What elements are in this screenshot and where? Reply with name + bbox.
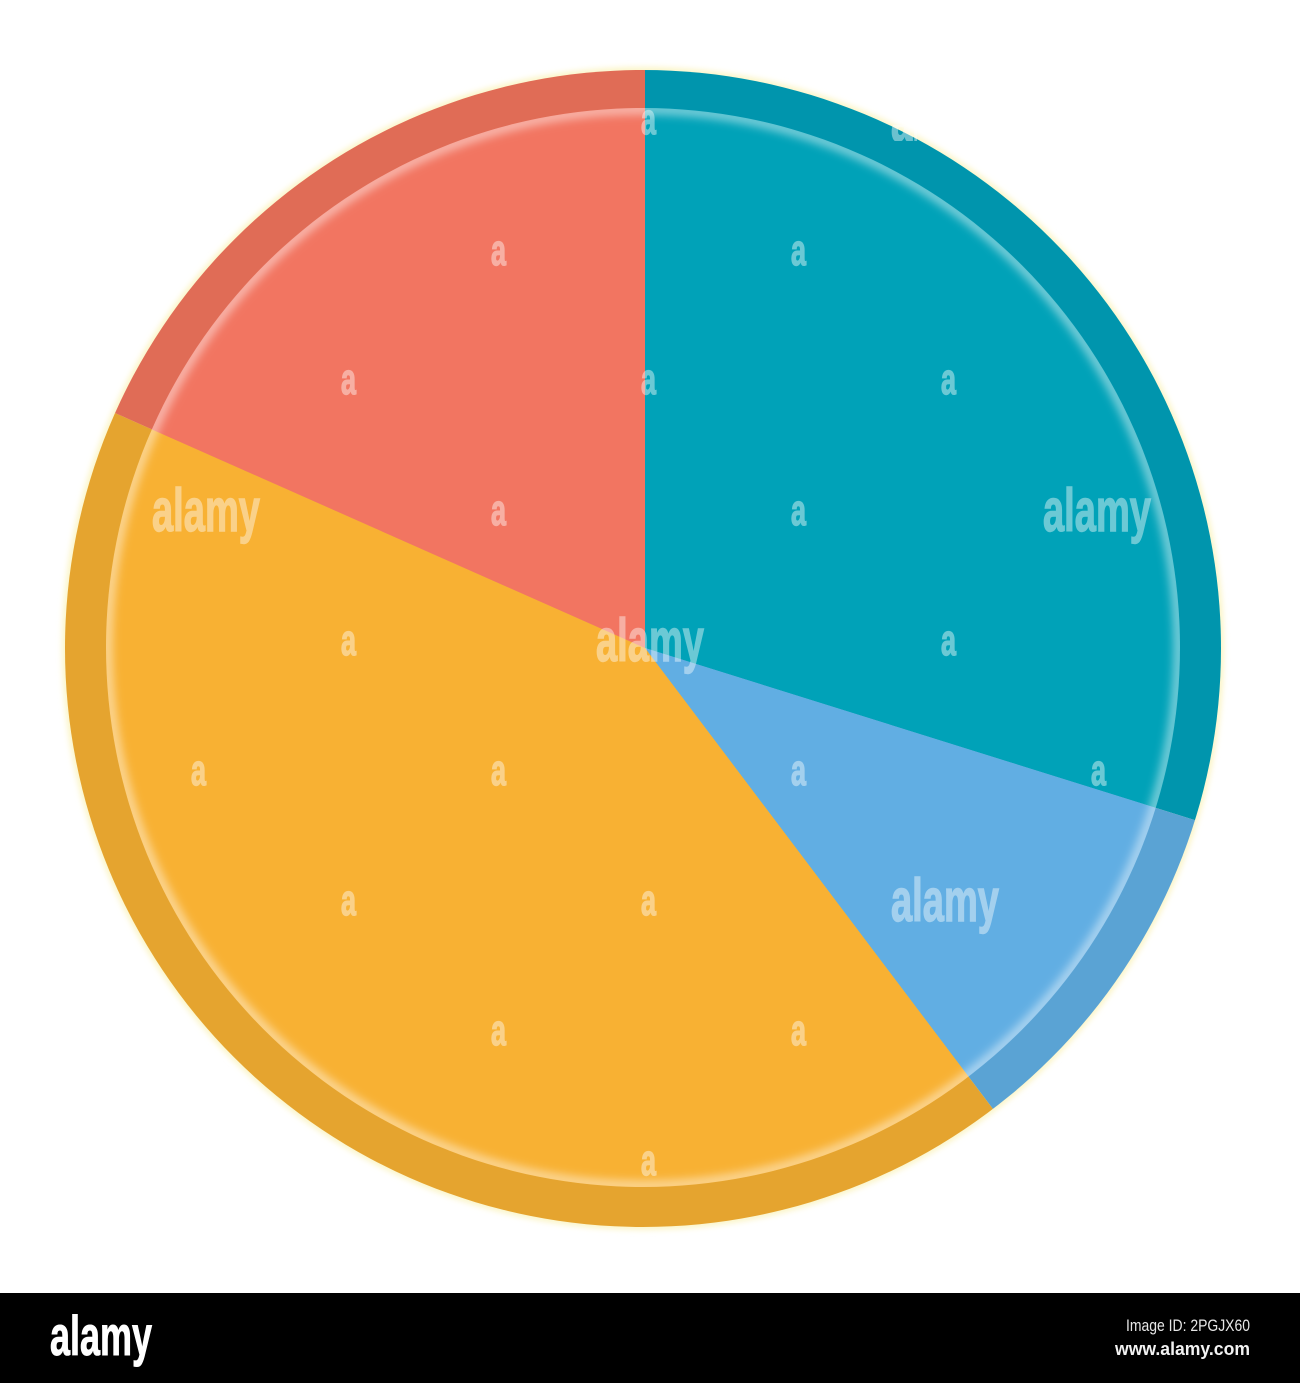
watermark: repeated small letters: a — [191, 746, 206, 795]
watermark: repeated small letters: a — [641, 1136, 656, 1185]
watermark: repeated small letters: a — [791, 746, 806, 795]
soft cream halo around pie — [62, 67, 1224, 1230]
watermark: repeated small letters: a — [641, 95, 656, 144]
website: www.alamy.com — [1114, 1339, 1250, 1359]
watermark: alamy logos: alamy — [891, 87, 999, 154]
watermark: repeated small letters: a — [791, 1006, 806, 1055]
watermark: repeated small letters: a — [791, 226, 806, 275]
watermark: repeated small letters: a — [341, 616, 356, 665]
watermark: alamy logos: alamy — [152, 477, 260, 544]
segment: light blue — [645, 648, 1156, 1076]
watermark: repeated small letters: a — [1091, 746, 1106, 795]
segment: coral — [152, 108, 645, 648]
watermark: repeated small letters: a — [941, 616, 956, 665]
watermark: repeated small letters: a — [491, 746, 506, 795]
watermark: repeated small letters: a — [641, 355, 656, 404]
watermark: alamy logos: alamy — [891, 867, 999, 934]
outer ring segments — [65, 70, 1221, 1227]
watermark: repeated small letters: a — [641, 876, 656, 925]
watermark: repeated small letters — [191, 95, 1106, 1185]
segment: teal — [645, 110, 1178, 808]
watermark: repeated small letters: a — [491, 1006, 506, 1055]
watermark: repeated small letters: a — [941, 355, 956, 404]
footer bar — [0, 1293, 1300, 1383]
watermark: repeated small letters: a — [341, 876, 356, 925]
watermark: alamy logos: alamy — [596, 607, 704, 674]
image id: Image ID: 2PGJX60 — [1126, 1316, 1250, 1335]
pie chart — [59, 64, 1227, 1233]
watermark: repeated small letters: a — [341, 355, 356, 404]
watermark: alamy logos: alamy — [1043, 477, 1151, 544]
inner disc segments — [106, 108, 1180, 1187]
footer logo: alamy — [50, 1304, 152, 1367]
watermark: repeated small letters: a — [491, 486, 506, 535]
watermark: repeated small letters: a — [791, 486, 806, 535]
watermark: repeated small letters: a — [491, 226, 506, 275]
inner bevel glow — [107, 109, 1179, 1186]
segment: amber — [106, 430, 968, 1187]
watermark: alamy logos — [152, 87, 1151, 934]
